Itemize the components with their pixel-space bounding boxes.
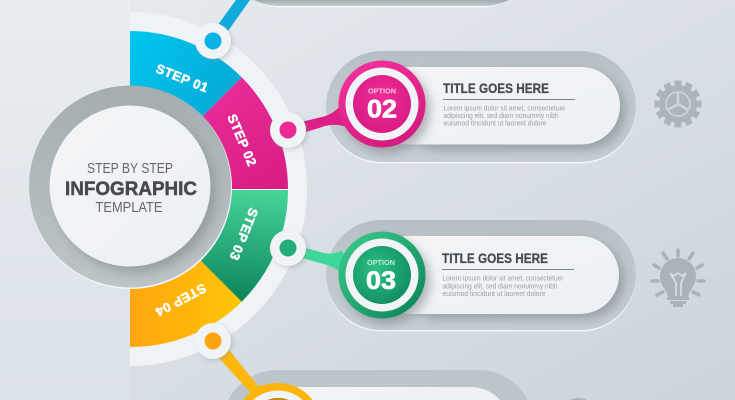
label: step 04: STEP 04 <box>153 280 209 320</box>
badge: option 03 <box>338 232 430 324</box>
wedge: step 04 <box>130 190 242 347</box>
label: step 03: STEP 03 <box>227 206 261 262</box>
hub text: line 3: TEMPLATE <box>96 199 162 216</box>
badge: option 02 <box>338 60 430 153</box>
wedge: step 02 <box>130 77 288 189</box>
option number: 02 <box>367 96 397 124</box>
white label bar 04 <box>270 387 500 400</box>
body 02 <box>444 106 566 128</box>
white label bar 02 <box>370 67 620 144</box>
text block: option 03 <box>442 251 574 298</box>
node: blue dot <box>195 23 233 61</box>
option label: OPTION <box>368 88 396 96</box>
body 03: euismod tincidunt ut laoreet dolore <box>442 291 546 298</box>
text block: option 02 <box>443 81 575 128</box>
hub text: line 1: STEP BY STEP <box>87 160 173 177</box>
body 02: euismod tincidunt ut laoreet dolore <box>444 120 547 128</box>
centre hub <box>29 86 232 289</box>
panel: option 02 pill <box>326 51 636 164</box>
body 02: Lorem ipsum dolor sit amet, consectetuer <box>444 106 566 112</box>
connector: green <box>288 243 352 285</box>
icon: partly visible option 04 icon <box>570 398 587 400</box>
panel: option 03 pill <box>326 220 636 332</box>
wedge: step 01 <box>130 31 242 189</box>
connector: blue <box>209 0 250 45</box>
connector: pink <box>288 104 350 137</box>
label: step 01: STEP 01 <box>154 61 210 95</box>
connector: yellow <box>207 336 270 400</box>
left panel <box>0 0 130 400</box>
node: yellow dot <box>195 323 233 361</box>
icon: gear <box>654 80 702 128</box>
wedge: step 03 <box>130 190 288 302</box>
badge: option 04 (cropped) <box>243 383 313 400</box>
panel: option 01 (cropped at top) <box>254 0 509 8</box>
white label bar 03 <box>370 236 619 314</box>
body 03: Lorem ipsum dolor sit amet, consectetuer <box>442 276 564 282</box>
option label: OPTION <box>367 260 395 267</box>
label: step 02: STEP 02 <box>224 112 260 168</box>
body 03: adipiscing elit, sed diam nonummy nibh <box>442 284 558 290</box>
panel: option 04 pill (cropped at bottom) <box>228 370 528 400</box>
step ring <box>130 12 307 366</box>
option number: 03 <box>366 267 396 295</box>
hub text: line 2: INFOGRAPHIC <box>65 178 197 200</box>
node: green dot <box>270 230 308 268</box>
outer white arc <box>130 12 307 366</box>
body 03 <box>442 276 564 298</box>
icon: light bulb <box>652 250 704 307</box>
title 02: TITLE GOES HERE <box>443 81 549 96</box>
body 02: adipiscing elit, sed diam nonummy nibh <box>444 113 559 120</box>
title 03: TITLE GOES HERE <box>442 251 548 266</box>
node: pink dot <box>270 112 308 150</box>
